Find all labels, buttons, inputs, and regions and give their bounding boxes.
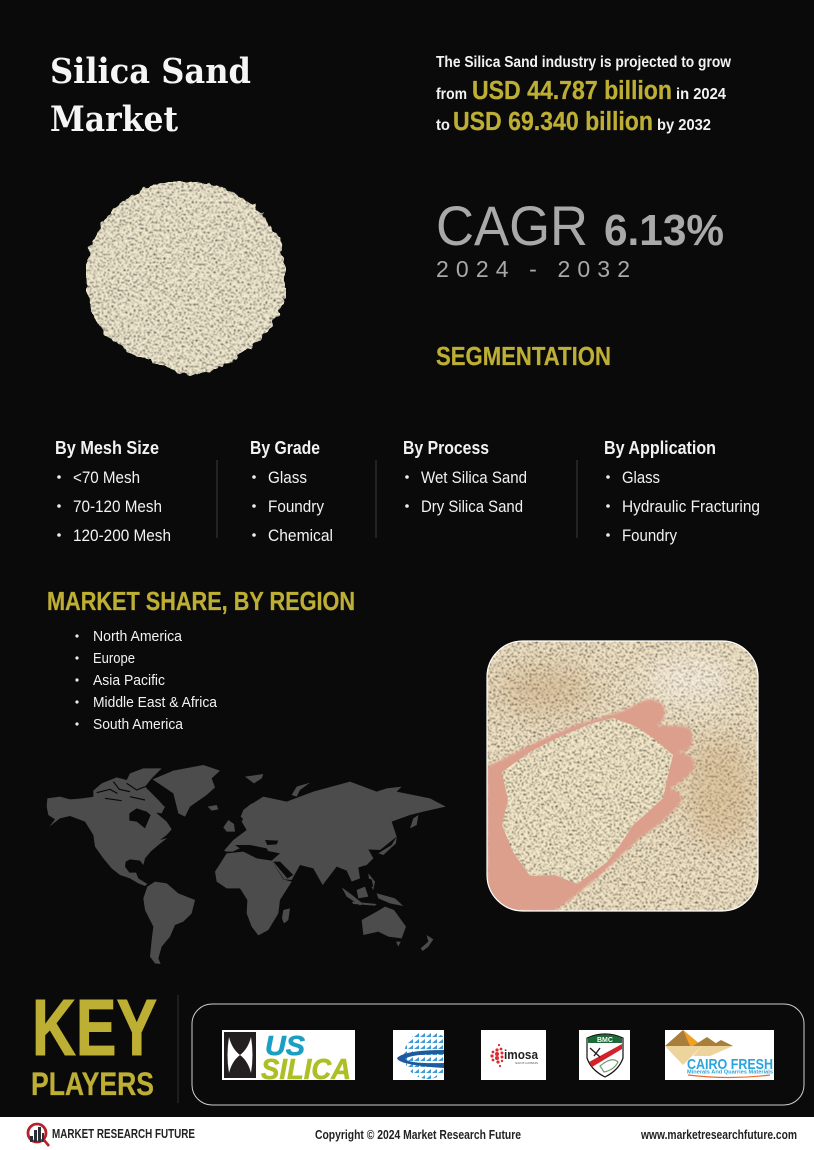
sand in palm xyxy=(502,718,673,884)
segment: by mesh size: By Mesh Size xyxy=(55,438,159,458)
photo: hand holding sand xyxy=(487,641,758,911)
key players heading: KEY xyxy=(32,983,157,1072)
logo: Imosa: SAINT-GOBAIN xyxy=(515,1061,538,1065)
region list: South America xyxy=(93,716,184,733)
logo: Imosa: imosa xyxy=(504,1048,539,1062)
segment: by mesh size xyxy=(55,438,171,545)
hand xyxy=(487,700,694,911)
image: sand pile xyxy=(86,181,286,376)
segment: by process xyxy=(403,438,527,516)
segment: by grade: By Grade xyxy=(250,438,320,458)
heading: segmentation: SEGMENTATION xyxy=(436,341,611,371)
market projection text: USD 44.787 billion xyxy=(472,77,672,105)
region list: Middle East & Africa xyxy=(93,694,218,711)
logo: Cairo Fresh: CAIRO FRESH xyxy=(687,1056,773,1073)
segment: by application xyxy=(604,438,760,545)
segment: by application: Glass xyxy=(622,469,660,487)
segment: by mesh size: <70 Mesh xyxy=(73,469,140,487)
key players heading: PLAYERS xyxy=(31,1066,154,1102)
region list: Asia Pacific xyxy=(93,672,165,689)
market projection text: The Silica Sand industry is projected to grow xyxy=(436,54,731,71)
logo: US Silica: SILICA xyxy=(261,1054,351,1086)
logo: BMC xyxy=(579,1030,630,1080)
market projection text xyxy=(436,54,731,136)
footer: Copyright © 2024 Market Research Future xyxy=(315,1127,521,1142)
CAGR xyxy=(436,194,724,282)
segment: by mesh size: 120-200 Mesh xyxy=(73,527,171,545)
region list: Europe xyxy=(93,650,135,667)
segment: by process: Dry Silica Sand xyxy=(421,498,523,516)
region list xyxy=(75,628,218,733)
logo: BMC: BMC xyxy=(597,1037,613,1044)
title: Silica Sand xyxy=(50,51,251,92)
photo border xyxy=(487,641,758,911)
key players heading xyxy=(31,983,157,1102)
key players panel xyxy=(192,1004,804,1105)
market projection text: by 2032 xyxy=(657,117,711,134)
title xyxy=(50,51,251,140)
logo: globe xyxy=(393,1030,444,1080)
market projection text: from xyxy=(436,86,467,103)
footer xyxy=(0,1117,814,1150)
segment: by process: By Process xyxy=(403,438,489,458)
segment: by grade: Chemical xyxy=(268,527,333,545)
market projection text: USD 69.340 billion xyxy=(453,108,653,136)
footer: MARKET RESEARCH FUTURE xyxy=(52,1126,195,1141)
CAGR: 2024 - 2032 xyxy=(436,256,630,282)
CAGR: 6.13% xyxy=(604,206,724,255)
footer logo icon xyxy=(28,1124,49,1146)
logo: US Silica: US xyxy=(265,1030,305,1061)
segment: by application: Foundry xyxy=(622,527,678,545)
market projection text: in 2024 xyxy=(676,86,726,103)
logo: Imosa xyxy=(481,1030,546,1080)
world map xyxy=(47,765,446,964)
segment: by process: Wet Silica Sand xyxy=(421,469,527,487)
logo: US Silica xyxy=(222,1030,355,1086)
segment: by grade xyxy=(250,438,333,545)
heading: market share by region: MARKET SHARE, BY REGION xyxy=(47,586,355,616)
logo: Cairo Fresh: Minerals And Quarries Materials xyxy=(687,1070,773,1076)
logo: Cairo Fresh xyxy=(665,1030,774,1080)
segment: by mesh size: 70-120 Mesh xyxy=(73,498,162,516)
segment: by grade: Glass xyxy=(268,469,307,487)
market projection text: to xyxy=(436,117,450,134)
segment: by application: By Application xyxy=(604,438,716,458)
segment: by grade: Foundry xyxy=(268,498,325,516)
region list: North America xyxy=(93,628,183,645)
title: Market xyxy=(50,99,178,140)
segment: by application: Hydraulic Fracturing xyxy=(622,498,760,516)
CAGR: CAGR xyxy=(436,194,588,257)
